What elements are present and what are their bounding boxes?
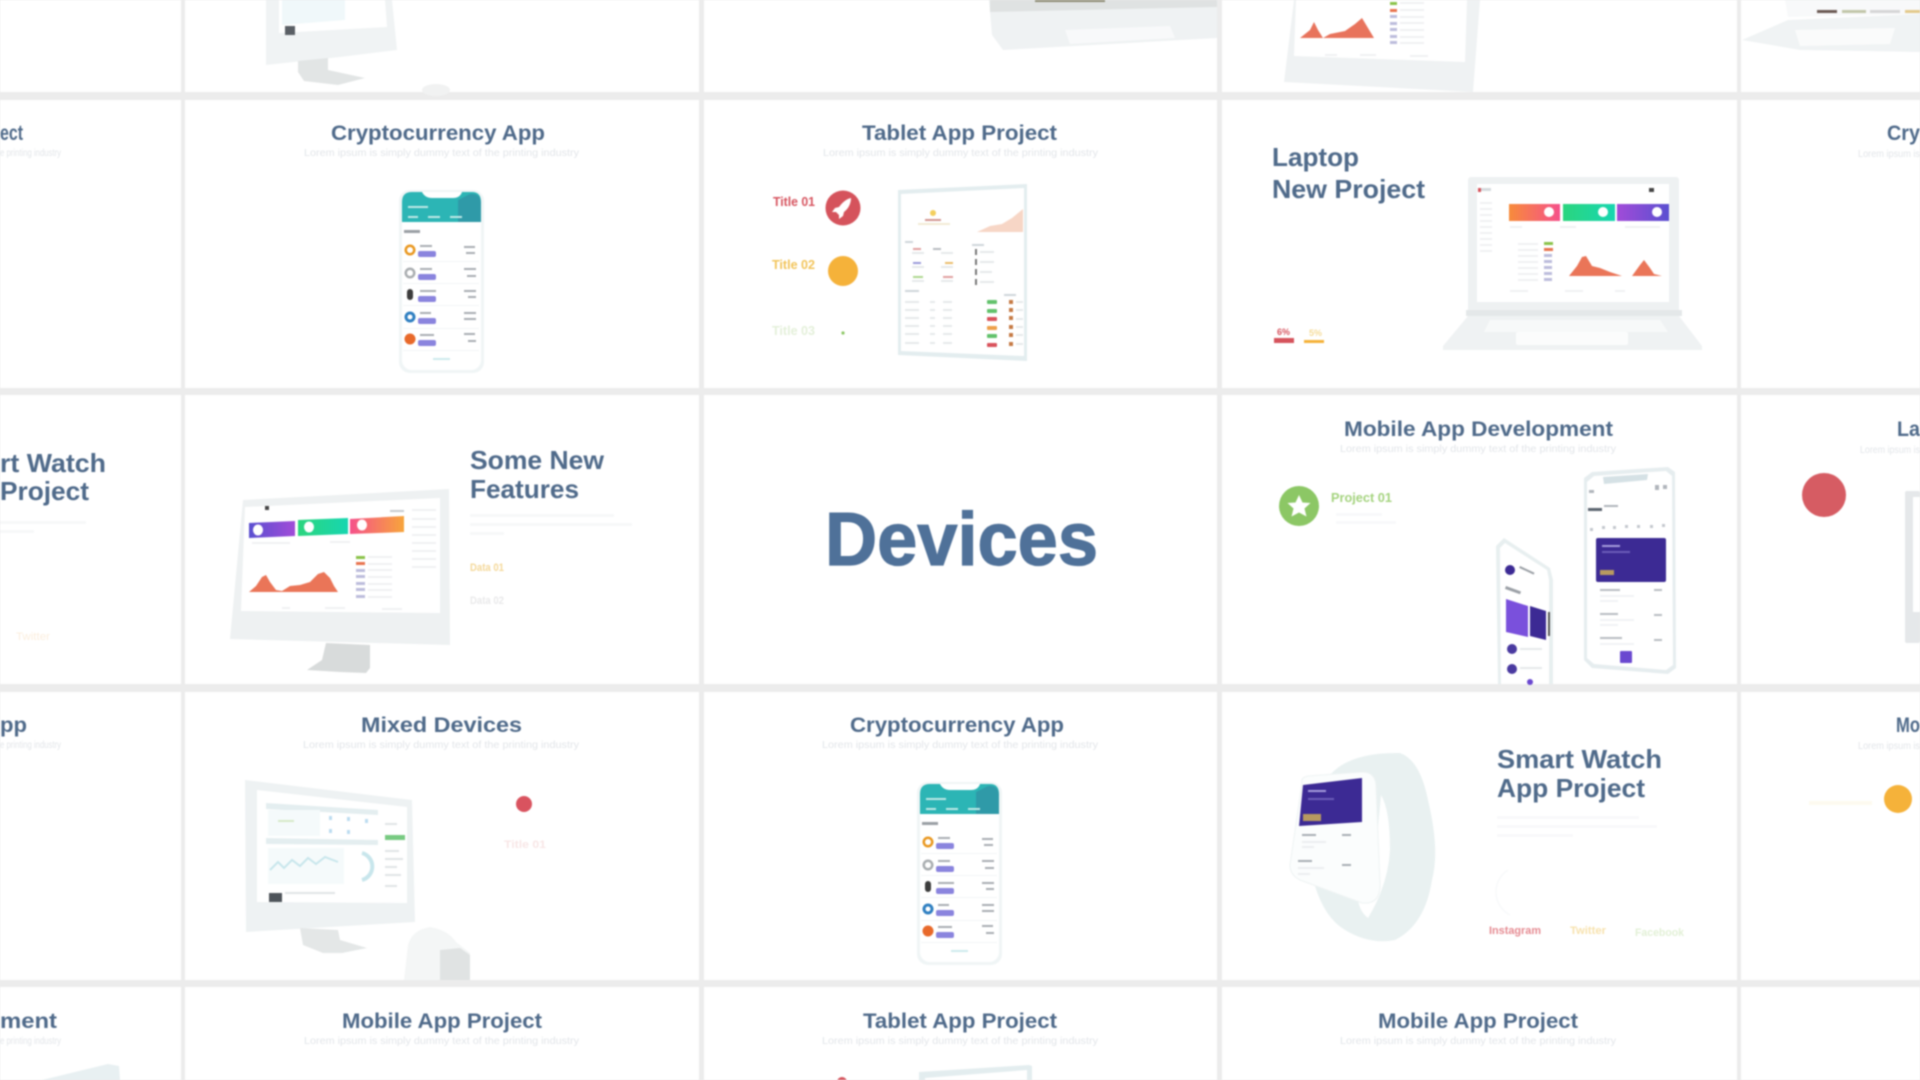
heading: Tablet App Project [863,1010,1057,1033]
label: Data 02: Data 02 [470,595,504,607]
label: Title 01: Title 01 [504,839,546,851]
panel: Smart Watch App Project [1290,744,1685,941]
label: Twitter: Twitter [1570,925,1607,937]
stat: 5% yellow bar: 5% [1309,328,1322,338]
subtitle fragment row 4: e printing industry [0,1036,61,1047]
subtitle: Lorem ipsum is simply dummy text of the printing industry [822,1036,1098,1047]
tablet mockup [898,184,1027,361]
heading: Smart Watch [1497,744,1662,774]
desktop mockup [230,489,450,673]
panel: top row desktop with area chart [1284,0,1480,92]
phone mockup [399,190,484,373]
subtitle: Lorem ipsum is simply dummy text of the printing industry [822,740,1098,751]
panel: Tablet App Project bottom [822,1010,1098,1080]
heading: Cryptocurrency App [850,714,1064,737]
title fragment: Cryptocurrency App left: pp [0,714,27,737]
icon: green dot [841,331,845,335]
body copy [470,514,632,535]
label: Title 01: Title 01 [773,194,815,209]
panel: Tablet App Project [772,122,1098,361]
smart watch mockup [1290,753,1435,941]
tablet fragment [919,1065,1032,1080]
panel: Laptop New Project [1272,142,1702,350]
icon: red circle [1802,473,1846,517]
label: Data 01: Data 01 [470,562,504,574]
label: Facebook: Facebook [1635,927,1685,939]
body copy [1497,816,1657,837]
label: Project 01: Project 01 [1331,490,1392,505]
heading: Mobile App Development [1344,418,1613,441]
icon: rocket on red circle [826,190,860,226]
panel: Mixed Devices [245,714,579,980]
subtitle: Lorem ipsum is simply dummy text of the printing industry [823,148,1098,159]
title fragment: Mobile App Development left: ment [0,1010,57,1033]
phone mockup [917,782,1002,965]
label: Instagram: Instagram [1489,925,1541,937]
panel: top row right laptop fragment [1742,0,1920,52]
heading: Mobile App Project [342,1010,542,1033]
subtitle fragment row 1: e printing industry [0,148,61,159]
small phone mockup [1496,538,1553,685]
subtitle fragment row 3: e printing industry [0,740,61,751]
stat: 6% red bar: 6% [1277,327,1290,337]
panel: Mobile App Project [304,1010,579,1047]
icon: star on green circle [1279,486,1319,526]
panel: Mobile right fragment [1809,714,1920,813]
icon: red circle top [837,1077,847,1080]
title: Tablet App Project fragment: ect [0,122,23,145]
device fragment [1905,491,1920,643]
heading line two: Project [0,476,89,506]
heading: Tablet App Project [862,122,1057,145]
stat: 5% yellow bar [1304,328,1324,343]
laptop mockup [1443,177,1702,350]
heading: Cryptocurrency App [331,122,545,145]
large phone mockup [1584,467,1676,674]
panel: Cryptocurrency App centre [822,714,1098,965]
panel: top row desktop fragment [266,0,450,96]
heading: Mobile App Project [1378,1010,1578,1033]
heading line two: New Project [1272,174,1425,204]
title: Devices: Devices [825,497,1098,581]
panel: Laptop project right fragment [1802,418,1920,643]
subtitle: Lorem ipsum is simply dummy text of the printing industry [1340,1036,1616,1047]
stat: 6% red bar [1274,327,1294,343]
label: Title 02: Title 02 [772,257,815,272]
label: Title 03: Title 03 [772,323,815,338]
heading: Mixed Devices [361,714,522,737]
panel: Mobile App Project bottom right [1340,1010,1616,1047]
subtitle: Lorem ipsum is simply dummy text of the printing industry [1340,444,1616,455]
icon: red dot [516,796,532,812]
heading: Some New [470,445,605,475]
icon: orange circle [828,256,858,286]
smart watch fragment [404,927,470,980]
body copy [1336,513,1396,524]
pale label [1809,801,1872,805]
heading: Laptop [1272,142,1359,172]
faint circular progress [1496,870,1510,915]
label fragment: Twitter [16,631,50,643]
subtitle: Lorem ipsum is simply dummy text of the printing industry [304,148,579,159]
desktop mockup [245,780,415,953]
subtitle: Lorem ipsum is simply dummy text of the printing industry [303,740,579,751]
panel: top row laptop base fragment [989,0,1217,50]
panel: Cryptocurrency App [304,122,579,373]
subtitle: Lorem ipsum is simply dummy text of the printing industry [304,1036,579,1047]
heading line two: Features [470,474,579,504]
panel: Mobile App Development [1279,418,1676,685]
body copy fragment [0,521,86,533]
icon: orange circle [1884,785,1912,813]
panel: Smart Watch left fragment [0,448,106,643]
heading: rt Watch [0,448,106,478]
heading line two: App Project [1497,773,1645,803]
phone fragment bottom left [42,1064,120,1080]
panel: Some New Features [230,445,632,673]
